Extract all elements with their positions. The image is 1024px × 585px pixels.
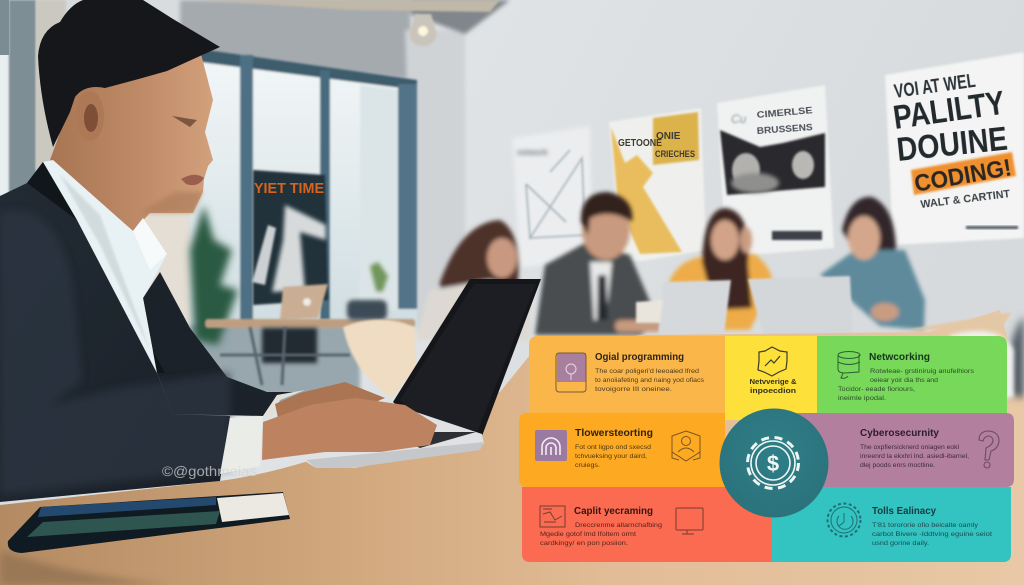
panel: yellow: inpoecdion <box>750 386 796 395</box>
coding poster: DOUINE <box>895 120 1009 168</box>
description: The oxpfiersicknerd oniagen eokl <box>860 444 959 451</box>
man in suit <box>535 192 665 335</box>
plant <box>190 205 238 345</box>
window with mullions <box>190 49 417 330</box>
foreground laptop <box>300 279 541 468</box>
description: dlej poods enrs moctline. <box>860 462 935 469</box>
panel: yellow: Netvverige & <box>750 377 797 386</box>
portrait poster: CIMERLSE <box>756 105 813 120</box>
icon: shield with person <box>672 431 700 461</box>
table <box>0 310 1024 585</box>
coding poster: WALT & CARTINT <box>920 188 1011 211</box>
central dollar badge <box>720 408 828 518</box>
icon: monitor <box>676 508 703 534</box>
icon: chart sheet <box>540 506 565 527</box>
woman in teal <box>820 197 925 330</box>
description: oeiear yoir dia ths and <box>870 377 939 384</box>
man: ear <box>76 91 104 141</box>
heading: Caplit yecraming <box>574 506 653 517</box>
description: Dreccrenme allarnchafbing <box>575 522 663 529</box>
woman in yellow <box>669 208 772 330</box>
panel: capital programming <box>522 487 772 562</box>
coding poster <box>885 52 1024 245</box>
woman 1 <box>415 220 530 340</box>
hanging lamp <box>409 14 437 46</box>
icon: server stack <box>838 352 860 378</box>
coding poster: PALILTY <box>891 84 1007 136</box>
description: carbot Bivere -Iddtving eguine seiot <box>872 531 992 538</box>
man: neck and face <box>50 50 213 231</box>
coding poster: CODING! <box>912 154 1014 198</box>
dollar sign: $ <box>767 451 779 476</box>
panel: tools <box>772 487 1011 562</box>
watermark: ©@gothmeias <box>162 463 257 479</box>
infographic panel <box>519 336 1014 562</box>
description: tovoigorre III oneinee. <box>595 386 672 393</box>
window poster: YIET TIME <box>254 180 324 197</box>
description: Mgedie gotof lmd Ifoltem ormt <box>540 531 636 538</box>
small plant <box>370 262 388 316</box>
panel: yellow <box>725 336 817 420</box>
man: hands <box>262 382 437 460</box>
background laptops <box>636 276 853 335</box>
heading: Netwcorking <box>869 352 930 363</box>
heading: Ogial programming <box>595 352 684 363</box>
man: hair <box>38 0 220 147</box>
heading: Tlowersteorting <box>575 428 653 439</box>
man: shirt <box>43 160 305 474</box>
icon: gear <box>828 504 860 536</box>
icon: gear ring <box>748 438 798 488</box>
coding poster: VOI AT WEL <box>893 71 977 103</box>
back chair <box>343 320 416 398</box>
description: The coar poligeri'd leeoaied lfred <box>595 368 700 375</box>
yellow poster: ONIE <box>656 131 681 142</box>
panel: digital programming <box>529 336 725 413</box>
description: to anoiiafeting and naing yod ofiacs <box>595 377 704 384</box>
description: cruiegs. <box>575 462 600 469</box>
icon: badge with trend line <box>758 347 787 376</box>
portrait poster: BRUSSENS <box>756 122 813 136</box>
window poster <box>252 170 328 305</box>
back table with laptop <box>205 284 415 385</box>
description: cardkingy/ en pon posiion. <box>540 540 628 547</box>
man: jacket <box>0 162 300 502</box>
panel: networking <box>817 336 1007 413</box>
icon: question mark <box>979 431 999 468</box>
description: Tocidor- eeade fioriours, <box>838 386 915 393</box>
heading: Cyberosecurnity <box>860 428 939 439</box>
description: T'81 torororie ofio beicalte oamly <box>872 522 979 529</box>
panel: cybersecurity <box>780 413 1014 487</box>
heading: Tolls Ealinacy <box>872 506 936 517</box>
description: Rotwleae- grstiniruig anufelhiors <box>870 368 974 375</box>
portrait poster <box>717 85 834 257</box>
description: usnd gorine daily. <box>872 540 929 547</box>
yellow poster <box>609 108 706 261</box>
description: inreenrd la ekxhri lnd. asiedl-ibarnel, <box>860 453 969 460</box>
icon: phone <box>556 353 586 392</box>
wall posters <box>512 52 1024 268</box>
man: mouth and eye <box>172 116 204 185</box>
description: Fot ont ligpo ond sxecsd <box>575 444 652 451</box>
description: tchvueksing your daird, <box>575 453 647 460</box>
network poster <box>512 126 592 268</box>
portrait poster: Cu <box>731 112 747 126</box>
icon: gauge tile <box>535 430 567 461</box>
yellow poster: GETOONE <box>618 138 662 149</box>
network poster: network <box>517 148 548 157</box>
floor and furniture behind glass <box>190 325 360 405</box>
panel: troubleshooting <box>519 413 725 487</box>
yellow poster: CRIECHES <box>655 149 695 159</box>
description: ineimle ipodal. <box>838 395 886 402</box>
phone and pen <box>8 492 290 553</box>
